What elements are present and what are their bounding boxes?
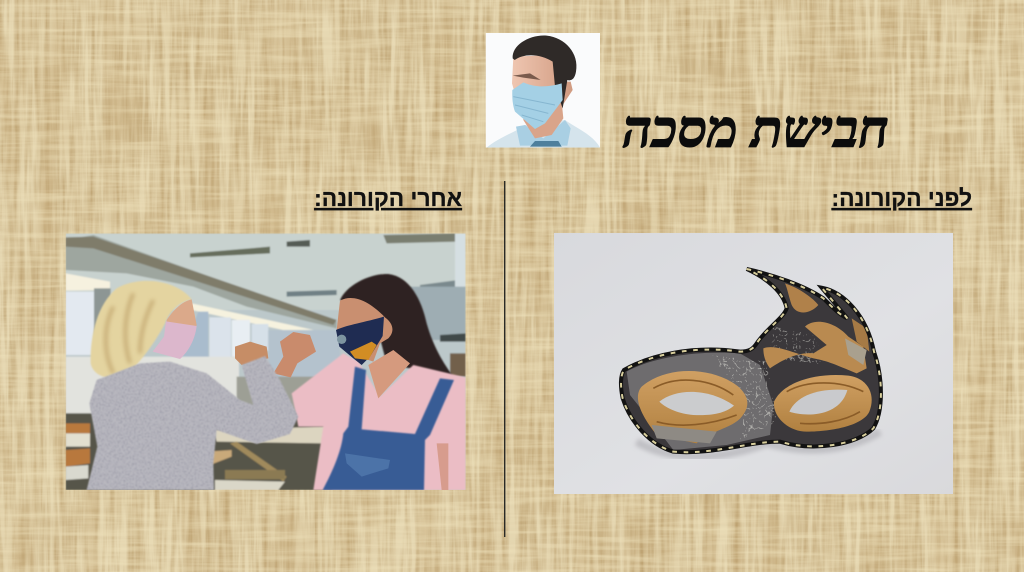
- factory background: [66, 233, 466, 490]
- woman left: fist: [235, 342, 268, 365]
- woman left: floral blouse: [87, 356, 298, 490]
- twisted rope edge: [621, 269, 881, 452]
- woman right: shirt: [292, 353, 466, 490]
- heading: after corona: אחרי הקורונה:: [314, 185, 462, 211]
- woman right: raised fist: [273, 332, 316, 377]
- woman right: face: [337, 298, 392, 362]
- woman right: hair behind: [340, 274, 454, 377]
- eye hole left: [659, 392, 734, 415]
- woman right: denim overalls: [323, 367, 454, 490]
- eye ring left: [638, 371, 747, 443]
- photo: masquerade mask on grey background: [554, 233, 953, 494]
- photo: man wearing surgical mask: [486, 33, 600, 148]
- woman right: patterned mask: [336, 317, 384, 365]
- gold ornament upper: [763, 322, 867, 373]
- title: חבישת מסכה: [622, 102, 889, 159]
- eye ring right: [774, 375, 872, 432]
- woman left: pink mask: [153, 321, 197, 359]
- icon: venetian mask: [621, 269, 881, 456]
- woman left: blonde hair: [91, 281, 192, 379]
- woman left: face: [166, 300, 197, 326]
- eye hole right: [789, 390, 847, 415]
- divider line: [504, 181, 505, 537]
- photo: two women in masks bumping elbows: [66, 233, 466, 490]
- heading: before corona: לפני הקורונה:: [831, 185, 972, 211]
